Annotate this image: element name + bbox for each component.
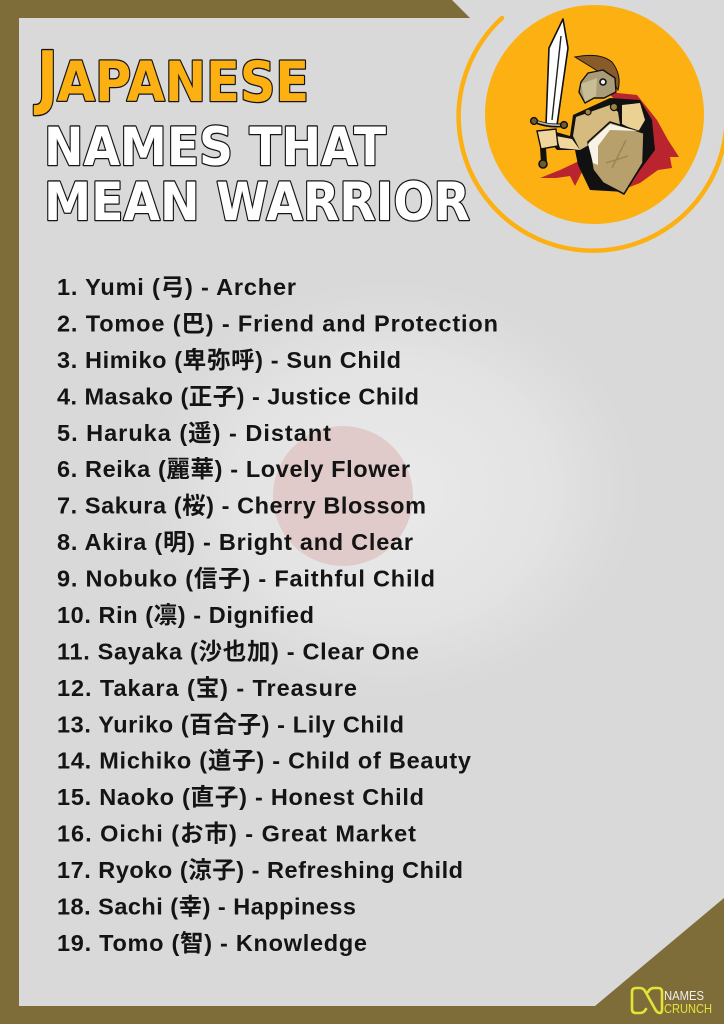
icon: warrior medallion	[485, 5, 704, 224]
title	[33, 37, 470, 233]
item 12: 12. Takara (宝) - Treasure	[57, 675, 357, 701]
torso and arm	[537, 98, 655, 192]
helmet with crest	[575, 55, 619, 103]
logo word: Crunch: CRUNCH	[664, 1001, 712, 1016]
item 7: 7. Sakura (桜) - Cherry Blossom	[57, 493, 426, 519]
faint background glow	[140, 280, 640, 700]
faded red sun	[273, 426, 413, 566]
yellow circle	[485, 5, 704, 224]
logo word: Names: NAMES	[664, 988, 704, 1003]
item 15: 15. Naoko (直子) - Honest Child	[57, 784, 424, 810]
item 17: 17. Ryoko (涼子) - Refreshing Child	[57, 857, 463, 883]
item 16: 16. Oichi (お市) - Great Market	[57, 821, 416, 847]
item 9: 9. Nobuko (信子) - Faithful Child	[57, 566, 435, 592]
shield	[588, 122, 644, 194]
item 1: 1. Yumi (弓) - Archer	[57, 274, 296, 300]
decorative ring	[459, 18, 724, 251]
sword	[531, 19, 568, 168]
title word: Japanese: J	[33, 37, 58, 118]
item 14: 14. Michiko (道子) - Child of Beauty	[57, 748, 471, 774]
title word: Japanese	[33, 37, 309, 118]
item 6: 6. Reika (麗華) - Lovely Flower	[57, 456, 410, 482]
item 5: 5. Haruka (遥) - Distant	[57, 420, 331, 446]
item 13: 13. Yuriko (百合子) - Lily Child	[57, 711, 404, 737]
title word: Japanese: APANESE	[57, 50, 309, 114]
title line: Names That: NAMES THAT	[44, 117, 386, 178]
item 10: 10. Rin (凛) - Dignified	[57, 602, 314, 628]
logo mark	[632, 988, 662, 1013]
red cape	[540, 92, 679, 190]
item 18: 18. Sachi (幸) - Happiness	[57, 894, 356, 920]
logo: Names Crunch	[632, 988, 712, 1016]
item 19: 19. Tomo (智) - Knowledge	[57, 930, 367, 956]
item 4: 4. Masako (正子) - Justice Child	[57, 383, 419, 409]
title line: Mean Warrior: MEAN WARRIOR	[44, 172, 470, 233]
item 8: 8. Akira (明) - Bright and Clear	[57, 529, 413, 555]
item 2: 2. Tomoe (巴) - Friend and Protection	[57, 310, 498, 336]
names list	[57, 274, 498, 956]
item 11: 11. Sayaka (沙也加) - Clear One	[57, 638, 419, 664]
item 3: 3. Himiko (卑弥呼) - Sun Child	[57, 347, 401, 373]
